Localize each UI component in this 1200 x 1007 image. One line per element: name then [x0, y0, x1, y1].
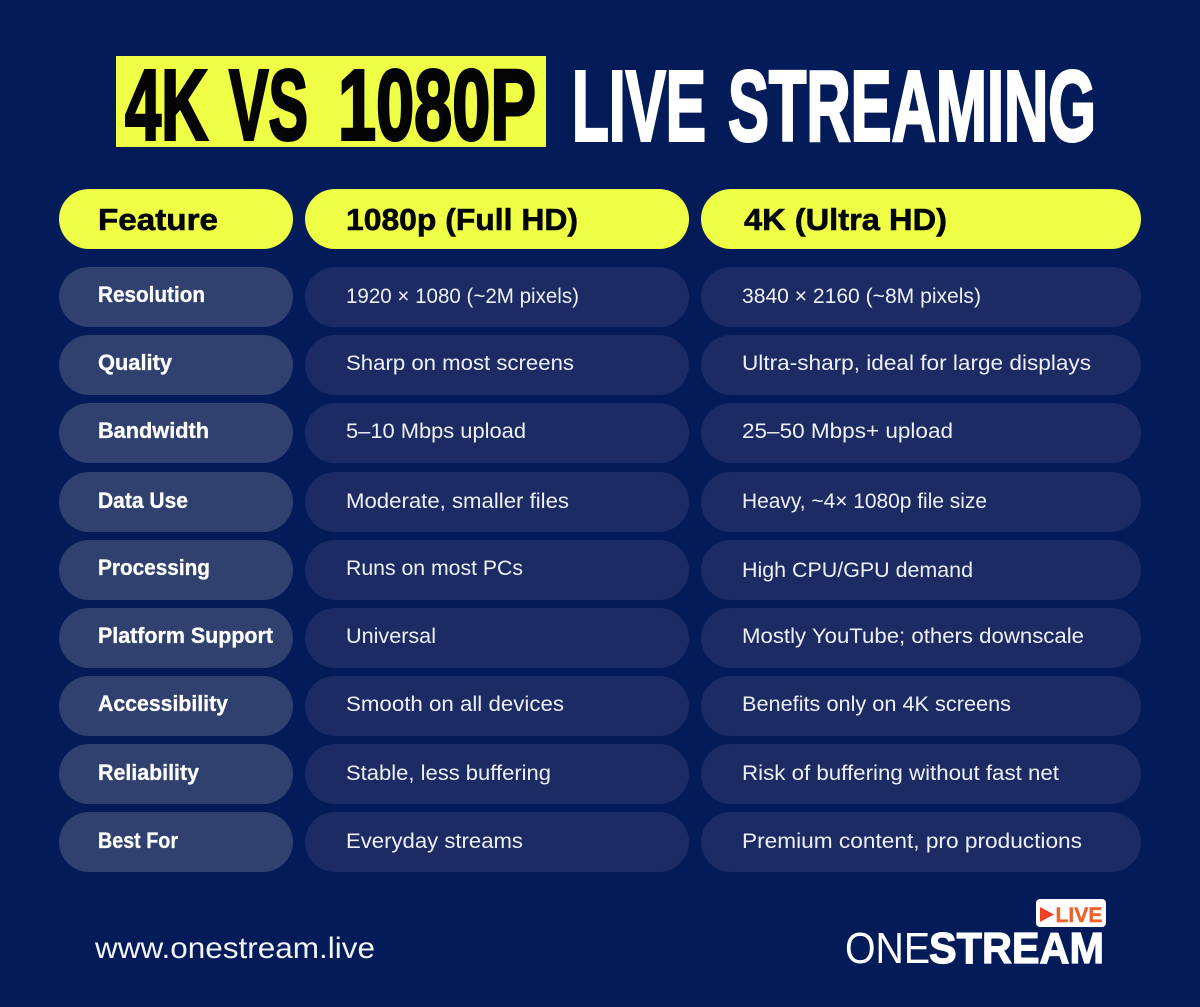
- row: platform support: Universal: [346, 624, 436, 648]
- header: 4K: [701, 189, 1141, 249]
- row: quality: Sharp on most screens: [346, 351, 574, 375]
- row: accessibility: Benefits only on 4K screens: [742, 692, 1011, 716]
- title text: live streaming: [572, 50, 1096, 162]
- logo wordmark: ONE: [845, 924, 930, 973]
- row: bandwidth: Bandwidth: [98, 418, 209, 443]
- header: feature: Feature: [98, 202, 218, 237]
- onestream live logo: [845, 899, 1106, 973]
- row: processing: Runs on most PCs: [346, 556, 523, 580]
- title highlight: 4K vs 1080p: 1080P: [338, 50, 536, 162]
- row: platform support: Platform Support: [98, 623, 273, 648]
- title highlight: 4K vs 1080p: [116, 50, 546, 162]
- row: platform support: [59, 608, 1141, 668]
- header: 1080p: [305, 189, 689, 249]
- logo wordmark: STREAM: [929, 924, 1104, 973]
- row: resolution: 3840 × 2160 (~8M pixels): [742, 284, 981, 308]
- row: processing: High CPU/GPU demand: [742, 558, 973, 582]
- title highlight: 4K vs 1080p: VS: [229, 50, 308, 162]
- row: best for: Everyday streams: [346, 829, 523, 853]
- row: resolution: Resolution: [98, 282, 205, 307]
- row: best for: Best For: [98, 828, 178, 853]
- row: best for: Premium content, pro productions: [742, 829, 1082, 853]
- logo wordmark: [845, 924, 1104, 973]
- row: reliability: Stable, less buffering: [346, 761, 551, 785]
- row: data use: Moderate, smaller files: [346, 489, 569, 513]
- row: reliability: Risk of buffering without fast net: [742, 761, 1059, 785]
- icon: live badge: LIVE: [1056, 904, 1102, 927]
- website url: www.onestream.live: [94, 932, 375, 965]
- icon: live badge: [1036, 899, 1106, 927]
- row: quality: Ultra-sharp, ideal for large displays: [742, 351, 1091, 375]
- row: resolution: [59, 267, 1141, 327]
- title highlight: 4K vs 1080p: 4K: [125, 50, 208, 162]
- row: resolution: 1920 × 1080 (~2M pixels): [346, 284, 579, 308]
- row: quality: Quality: [98, 350, 172, 375]
- title text: live streaming: LIVE: [572, 50, 706, 162]
- row: best for: [59, 812, 1141, 872]
- row: bandwidth: 5–10 Mbps upload: [346, 419, 526, 443]
- row: accessibility: Smooth on all devices: [346, 692, 564, 716]
- row: bandwidth: [59, 403, 1141, 463]
- header: 4K: 4K (Ultra HD): [744, 202, 947, 237]
- row: data use: Data Use: [98, 488, 188, 513]
- title: [116, 50, 1096, 162]
- header: feature: [59, 189, 293, 249]
- row: bandwidth: 25–50 Mbps+ upload: [742, 419, 953, 443]
- table header row: [59, 189, 1141, 249]
- row: data use: Heavy, ~4× 1080p file size: [742, 489, 987, 513]
- row: data use: [59, 472, 1141, 532]
- header: 1080p: 1080p (Full HD): [346, 202, 578, 237]
- row: quality: [59, 335, 1141, 395]
- row: processing: [59, 540, 1141, 600]
- row: accessibility: Accessibility: [98, 691, 228, 716]
- row: platform support: Mostly YouTube; others downscale: [742, 624, 1084, 648]
- row: reliability: Reliability: [98, 760, 199, 785]
- row: accessibility: [59, 676, 1141, 736]
- row: reliability: [59, 744, 1141, 804]
- row: processing: Processing: [98, 555, 210, 580]
